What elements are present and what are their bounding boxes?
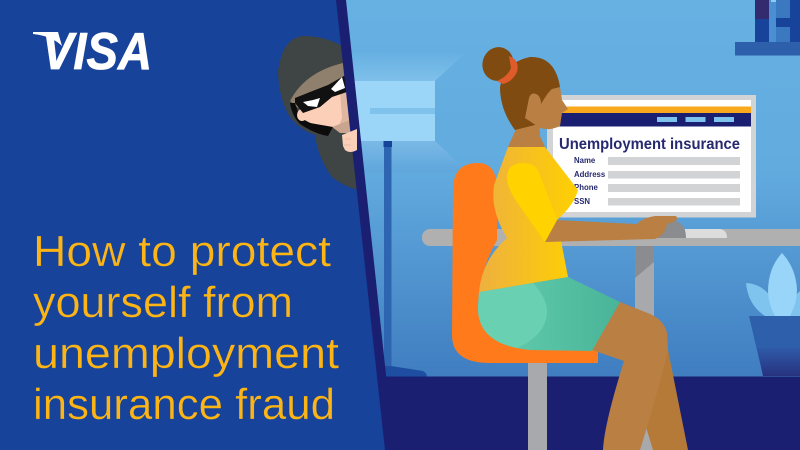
headline: insurance fraud	[33, 380, 335, 429]
headline: yourself from	[33, 278, 293, 327]
headline	[33, 227, 339, 429]
hair	[290, 63, 346, 108]
logo wing	[33, 32, 62, 46]
ear	[297, 109, 307, 121]
logo wordmark: VISA	[42, 23, 152, 81]
mask	[295, 75, 347, 113]
form fields	[574, 156, 740, 206]
form title: Unemployment insurance	[559, 136, 740, 153]
form fields: Phone	[574, 183, 598, 192]
mask eye right	[331, 77, 345, 92]
form fields: Name	[574, 156, 596, 165]
hair	[500, 57, 560, 130]
potted plant	[746, 253, 800, 376]
navy panel edge	[336, 0, 394, 450]
sleeve	[507, 163, 557, 242]
mouse pad	[685, 229, 727, 238]
computer monitor	[547, 95, 756, 218]
mask eye left	[303, 98, 320, 107]
chair post	[528, 360, 547, 450]
shirt	[479, 147, 578, 292]
face	[525, 87, 568, 129]
thief peeking from behind panel	[278, 36, 358, 190]
arm and hand	[545, 216, 677, 242]
hair bun	[479, 44, 517, 84]
Visa logo	[33, 23, 152, 81]
website header bands	[553, 106, 751, 126]
orange chair	[452, 163, 598, 363]
shorts	[478, 277, 620, 351]
headline: unemployment	[33, 329, 339, 378]
neck	[508, 105, 545, 147]
form fields: Address	[574, 170, 606, 179]
face	[300, 76, 350, 128]
headline: How to protect	[33, 227, 331, 276]
hood and cloak	[278, 36, 358, 190]
desk	[422, 229, 800, 450]
floor lamp	[384, 141, 427, 377]
woman at desk	[478, 44, 688, 450]
window with light beams	[340, 53, 468, 172]
black under hood	[290, 103, 333, 136]
left blue panel	[0, 0, 386, 450]
shorts highlight	[478, 283, 547, 348]
floor	[370, 376, 800, 450]
far leg	[646, 340, 688, 450]
neck shadow	[332, 120, 352, 133]
form fields: SSN	[574, 197, 590, 206]
room background wall	[330, 0, 800, 378]
wall shelf with books	[735, 0, 800, 56]
computer mouse	[650, 220, 686, 238]
face shadow	[338, 88, 352, 128]
thigh and near leg	[592, 302, 668, 450]
hair band	[497, 56, 518, 84]
thief fist gripping edge	[342, 129, 357, 152]
